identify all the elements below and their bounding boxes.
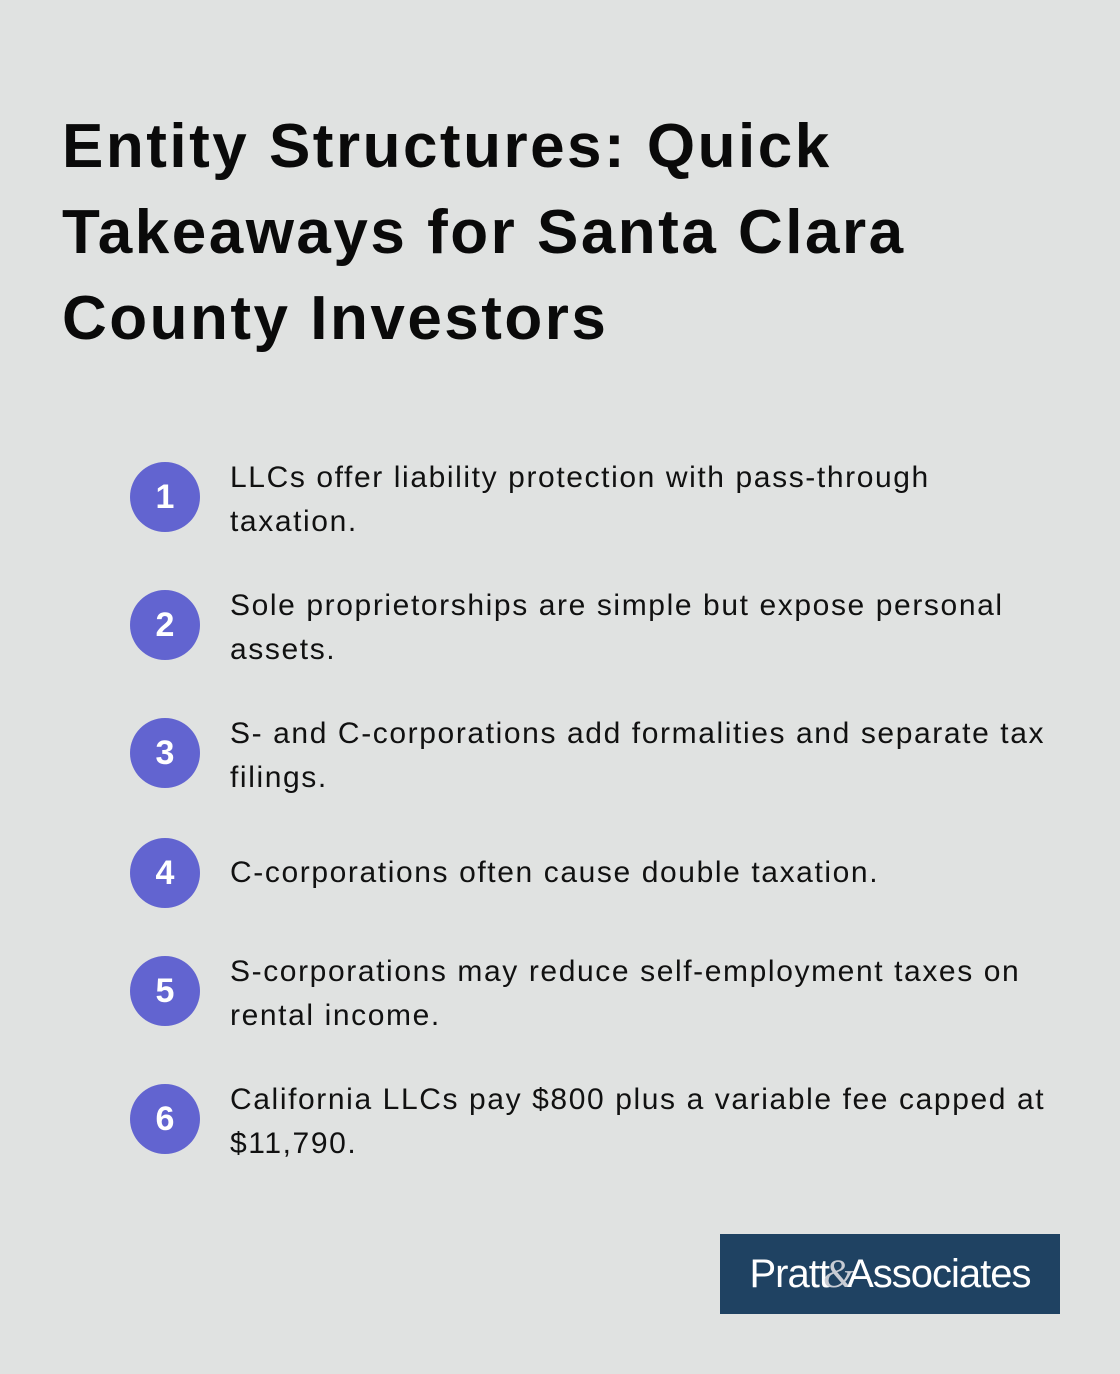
item 3: filings.	[230, 761, 328, 794]
item 6: 6	[156, 1100, 174, 1138]
title: Takeaways for Santa Clara	[62, 198, 906, 267]
title: Entity Structures: Quick	[62, 112, 832, 181]
item 6	[130, 1083, 1045, 1160]
item 2: assets.	[230, 633, 336, 666]
item 1: LLCs offer liability protection with pass-through	[230, 461, 930, 494]
item 3: S- and C-corporations add formalities and separate tax	[230, 717, 1045, 750]
logo: Pratt&Associates	[749, 1251, 1031, 1296]
item 1: taxation.	[230, 505, 358, 538]
item 1: 1	[156, 478, 174, 516]
title	[62, 112, 906, 353]
item 2: 2	[156, 606, 174, 644]
item 6: California LLCs pay $800 plus a variable fee capped at	[230, 1083, 1045, 1116]
item 3	[130, 717, 1045, 794]
item 4	[130, 838, 879, 908]
item 5	[130, 955, 1020, 1032]
item 3: 3	[156, 734, 174, 772]
title: County Investors	[62, 284, 608, 353]
item 2	[130, 589, 1004, 666]
item 5: S-corporations may reduce self-employment taxes on	[230, 955, 1020, 988]
item 6: $11,790.	[230, 1127, 357, 1160]
item 5: rental income.	[230, 999, 441, 1032]
logo	[720, 1234, 1060, 1314]
item 4: 4	[156, 854, 174, 892]
item 4: C-corporations often cause double taxation.	[230, 856, 879, 889]
item 2: Sole proprietorships are simple but expose personal	[230, 589, 1004, 622]
item 5: 5	[156, 972, 174, 1010]
item 1	[130, 461, 930, 538]
